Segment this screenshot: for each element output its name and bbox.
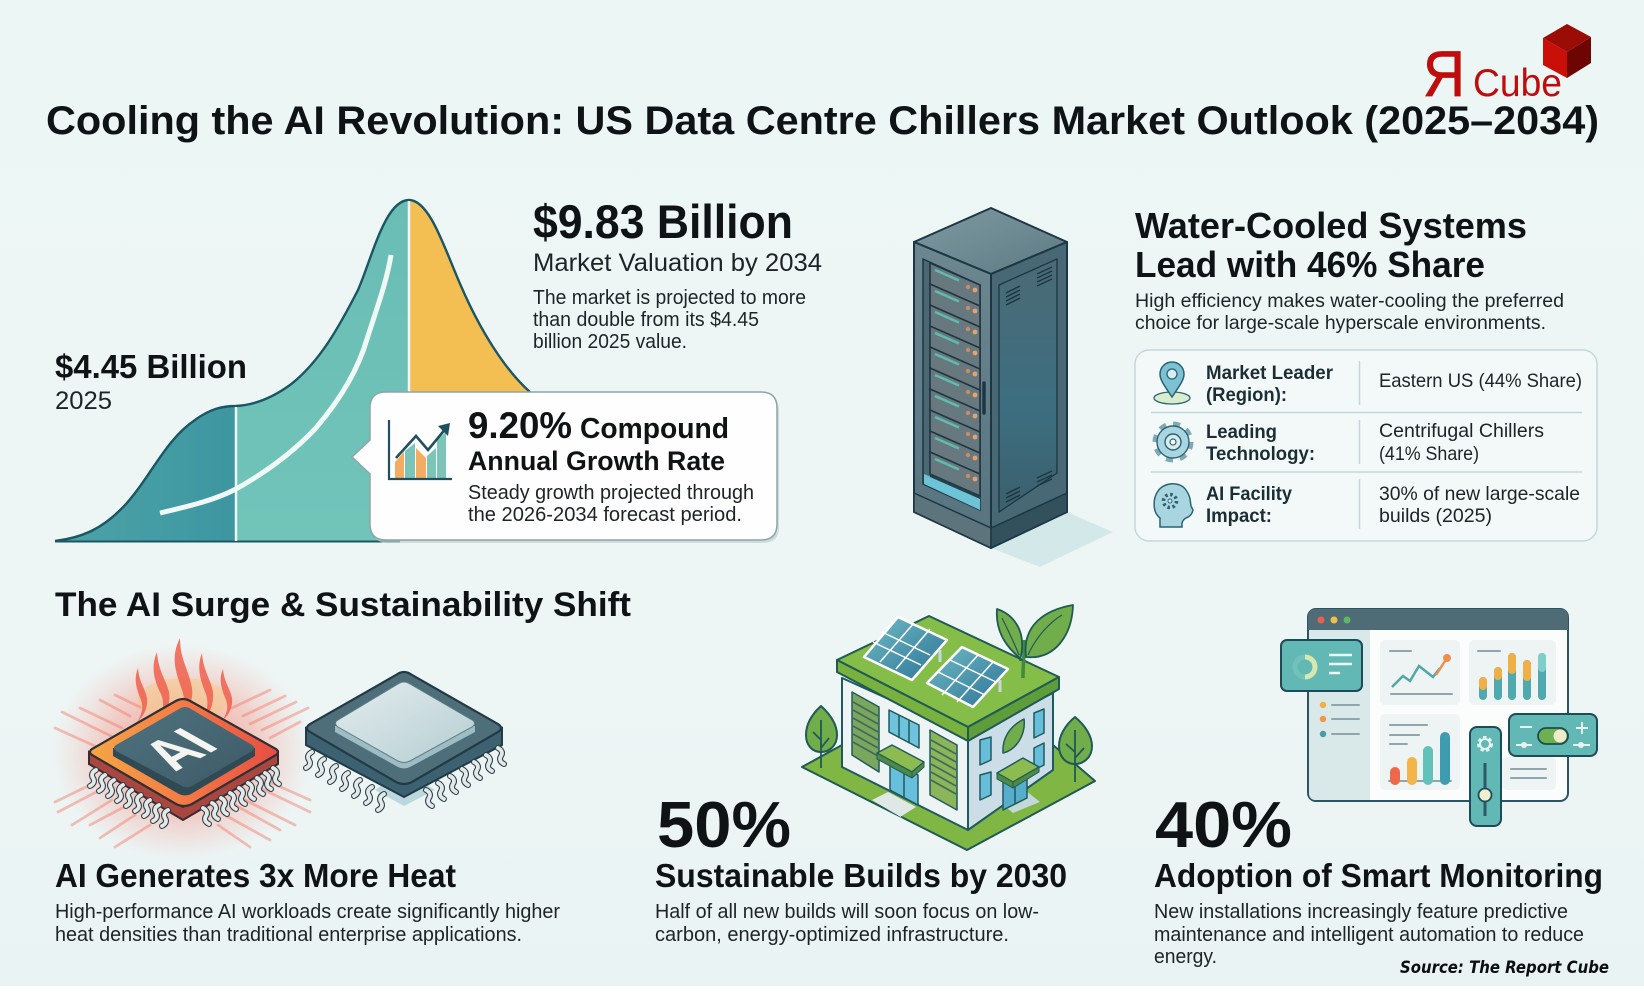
table: key stats: Market Leader [1206, 362, 1333, 384]
logo: RCube: Я [1423, 37, 1465, 110]
tree right [1059, 717, 1092, 782]
heading: AI surge: The AI Surge & Sustainability Shift [55, 586, 631, 624]
icon: gear [1155, 424, 1191, 460]
text: smart monitoring: 40% [1155, 788, 1292, 861]
text: sustainable builds: Half of all new builds will soon focus on low- [655, 901, 1039, 923]
tree left [806, 706, 837, 768]
icon: green building [802, 605, 1095, 850]
icon: server rack [914, 208, 1113, 567]
card: line chart [1380, 640, 1460, 705]
panel: water-cooled systems: Water-Cooled Systems [1135, 205, 1527, 246]
text: sustainable builds: 50% [657, 788, 791, 861]
table: key stats: Impact: [1206, 505, 1272, 527]
table: key stats: Centrifugal Chillers [1379, 420, 1544, 442]
label: 2034 valuation [533, 195, 822, 353]
label: 2034 valuation: Market Valuation by 2034 [533, 249, 822, 277]
solar panels [864, 617, 1008, 707]
panel: water-cooled systems [1135, 205, 1597, 541]
label: 2025 value: $4.45 Billion [55, 348, 247, 385]
text: smart monitoring [1154, 788, 1603, 968]
text: AI heat: AI Generates 3x More Heat [55, 857, 456, 894]
card: stacked bars [1469, 640, 1556, 705]
panel: toggle widget [1509, 714, 1597, 756]
label: 2034 valuation: The market is projected to more [533, 287, 806, 309]
callout: CAGR: Compound [580, 413, 729, 445]
icon: location pin [1154, 362, 1190, 404]
icon: growth chart [389, 420, 452, 479]
text: sustainable builds: carbon, energy-optimized infrastructure. [655, 924, 1009, 946]
source note: Source: The Report Cube [1400, 958, 1609, 978]
chip pins [306, 748, 504, 810]
text: sustainable builds [655, 788, 1067, 946]
logo: RCube [1423, 24, 1591, 110]
label: 2034 valuation: than double from its $4.45 [533, 309, 759, 331]
title: Cooling the AI Revolution: US Data Centre Chillers Market Outlook (2025–2034) [46, 99, 1599, 143]
icon: monitoring dashboard [1281, 609, 1597, 826]
callout: CAGR: the 2026-2034 forecast period. [468, 504, 742, 526]
panel: water-cooled systems: High efficiency makes water-cooling the preferred [1135, 290, 1564, 312]
sidebar list [1320, 702, 1359, 737]
label: 2034 valuation: $9.83 Billion [533, 195, 793, 248]
table: key stats [1135, 350, 1597, 541]
label: 2034 valuation: billion 2025 value. [533, 331, 687, 353]
icon: hot AI chip: AI [127, 720, 233, 779]
text: smart monitoring: maintenance and intelligent automation to reduce [1154, 924, 1584, 946]
text: AI heat [55, 857, 560, 946]
leaves [997, 605, 1073, 678]
callout: CAGR: Steady growth projected through [468, 482, 754, 504]
panel: donut widget [1281, 640, 1362, 691]
callout: CAGR [352, 392, 779, 543]
chart: market growth curve [55, 200, 600, 542]
panel: water-cooled systems: Lead with 46% Share [1135, 244, 1485, 285]
chip pins [90, 768, 279, 826]
panel: slider widget [1470, 727, 1501, 826]
panel: water-cooled systems: choice for large-scale hyperscale environments. [1135, 312, 1546, 334]
table: key stats: AI Facility [1206, 483, 1292, 505]
card: text lines [1502, 757, 1556, 790]
text: AI heat: High-performance AI workloads create significantly higher [55, 901, 560, 923]
logo: RCube: Cube [1473, 62, 1562, 105]
label: 2025 value: 2025 [55, 387, 112, 415]
text: smart monitoring: New installations increasingly feature predictive [1154, 901, 1568, 923]
table: key stats: 30% of new large-scale [1379, 483, 1580, 505]
table: key stats: Eastern US (44% Share) [1379, 370, 1582, 392]
text: AI heat: heat densities than traditional enterprise applications. [55, 924, 522, 946]
table: key stats: builds (2025) [1379, 505, 1492, 527]
table: key stats: (41% Share) [1379, 443, 1479, 465]
table: key stats: Technology: [1206, 443, 1315, 465]
panel: market growth [55, 195, 822, 543]
text: sustainable builds: Sustainable Builds by 2030 [655, 857, 1067, 894]
label: 2025 value [55, 348, 247, 415]
table: key stats: (Region): [1206, 384, 1287, 406]
text: smart monitoring: Adoption of Smart Monitoring [1154, 857, 1603, 894]
icon: head with gear [1154, 484, 1193, 527]
callout: CAGR: Annual Growth Rate [468, 446, 725, 476]
table: key stats: Leading [1206, 421, 1277, 443]
text: smart monitoring: energy. [1154, 946, 1217, 968]
icon: standard chip [306, 672, 504, 810]
card: bar chart [1380, 714, 1460, 790]
icon: heat flames [136, 638, 232, 722]
icon: hot AI chip [52, 638, 312, 860]
callout: CAGR: 9.20% [468, 405, 572, 446]
